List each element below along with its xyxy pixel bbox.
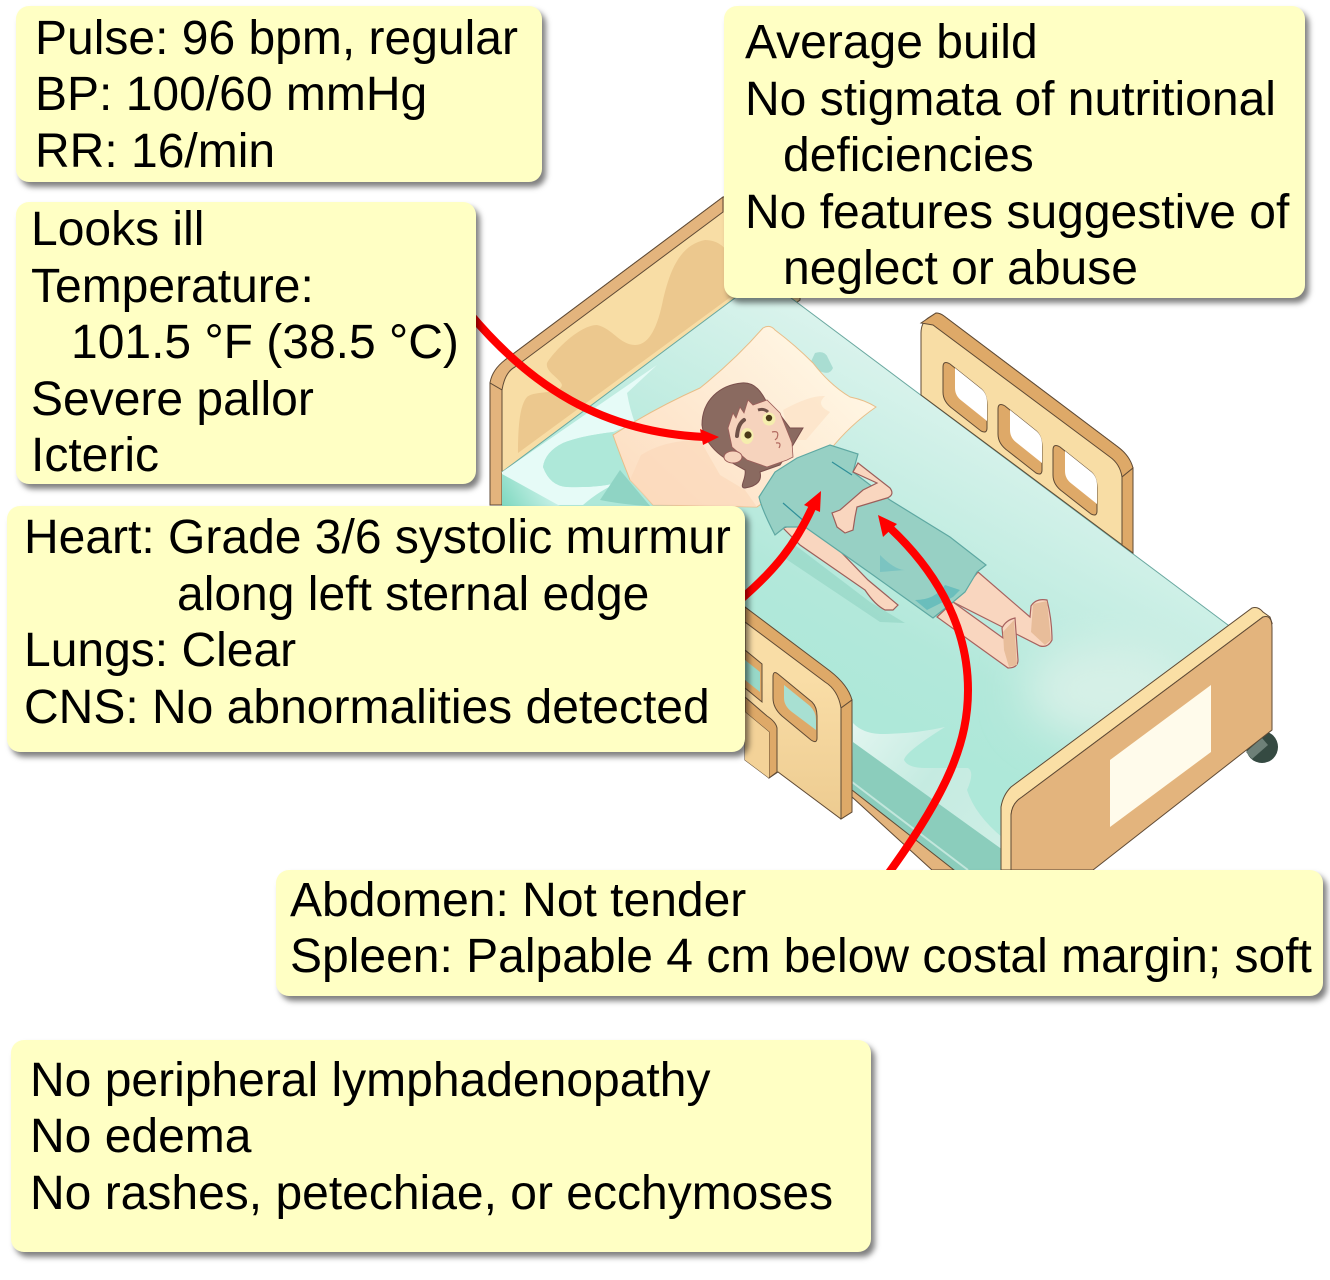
- text: build and nutrition: neglect or abuse: [783, 242, 1138, 295]
- frame rail under mattress: [852, 790, 954, 870]
- ear: [724, 451, 742, 463]
- text: negative findings: No edema: [30, 1110, 251, 1163]
- panel: general appearance: [16, 202, 476, 484]
- headboard: [490, 197, 800, 505]
- text: general appearance: Severe pallor: [31, 373, 314, 426]
- text: build and nutrition: No stigmata of nutritional: [745, 73, 1276, 126]
- text: negative findings: No rashes, petechiae, or ecchymoses: [30, 1167, 833, 1220]
- patient: [702, 383, 1052, 668]
- text: general appearance: Looks ill: [31, 203, 204, 256]
- footboard: [1001, 608, 1272, 870]
- text: abdomen: Abdomen: Not tender: [290, 874, 746, 927]
- text: vital signs: RR: 16/min: [35, 125, 275, 178]
- near side rail: [745, 607, 852, 819]
- bent arm: [832, 463, 892, 533]
- text: build and nutrition: Average build: [745, 16, 1038, 69]
- hair: [702, 383, 803, 488]
- text: vital signs: Pulse: 96 bpm, regular: [35, 12, 518, 65]
- far side rail: [921, 313, 1133, 553]
- face: [728, 400, 793, 467]
- text: general appearance: Temperature:: [31, 260, 314, 313]
- panel: negative findings: [11, 1040, 871, 1252]
- gown: [759, 445, 986, 618]
- text: general appearance: 101.5 °F (38.5 °C): [71, 316, 459, 369]
- text: heart, lungs, CNS: CNS: No abnormalities detected: [24, 681, 710, 734]
- text: build and nutrition: deficiencies: [783, 129, 1034, 182]
- text: negative findings: No peripheral lymphadenopathy: [30, 1054, 710, 1107]
- text: heart, lungs, CNS: Lungs: Clear: [24, 624, 296, 677]
- text: general appearance: [31, 203, 459, 482]
- text: vital signs: [35, 12, 518, 178]
- eyes and facial features: [737, 409, 780, 448]
- pillow: [613, 326, 876, 507]
- panel: heart, lungs, CNS: [7, 506, 745, 752]
- text: abdomen: Spleen: Palpable 4 cm below costal margin; soft: [290, 930, 1312, 983]
- text: abdomen: [290, 874, 1312, 983]
- wheel: [1246, 731, 1278, 763]
- text: heart, lungs, CNS: [24, 511, 731, 734]
- text: vital signs: BP: 100/60 mmHg: [35, 68, 427, 121]
- shadow beneath patient: [780, 545, 905, 623]
- panel: build and nutrition: [724, 6, 1305, 298]
- panel: abdomen: [276, 870, 1323, 996]
- text: build and nutrition: No features suggestive of: [745, 186, 1289, 239]
- lower arm: [783, 520, 898, 610]
- illustration: patient lying on hospital bed: [490, 196, 1278, 870]
- text: heart, lungs, CNS: along left sternal edge: [177, 568, 649, 621]
- mattress: [502, 277, 1240, 870]
- text: general appearance: Icteric: [31, 429, 159, 482]
- legs: [937, 572, 1052, 668]
- panel: vital signs: [16, 6, 542, 182]
- text: negative findings: [30, 1054, 833, 1220]
- text: heart, lungs, CNS: Heart: Grade 3/6 systolic murmur: [24, 511, 731, 564]
- text: build and nutrition: [745, 16, 1290, 295]
